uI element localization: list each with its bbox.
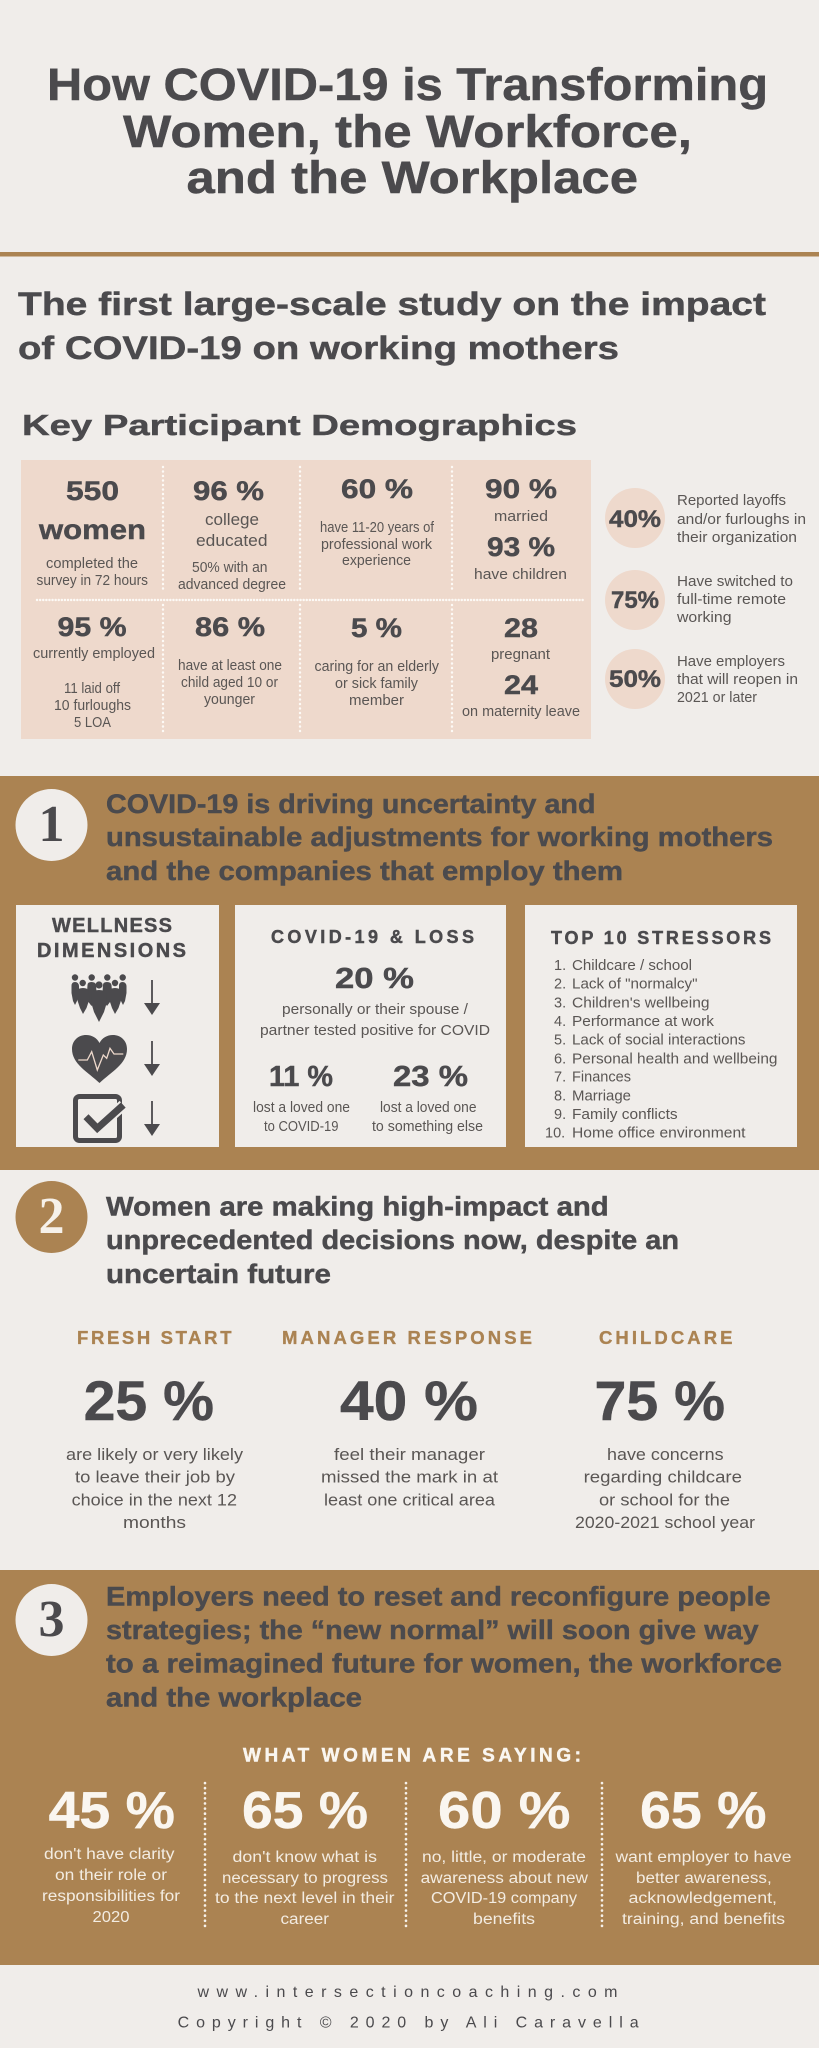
- stat: fresh start: [66, 1327, 244, 1532]
- card: top 10 stressors: 2.: [554, 977, 566, 993]
- stat: 65% employer awareness: [614, 1782, 792, 1928]
- card: covid-19 and loss: to COVID-19: [264, 1119, 338, 1135]
- card: wellness dimensions: DIMENSIONS: [37, 940, 186, 962]
- stat: 45%: don't have clarity: [44, 1846, 175, 1863]
- card: wellness dimensions: WELLNESS: [52, 915, 172, 937]
- card: covid-19 and loss: [235, 905, 506, 1147]
- footer: Copyright © 2020 by Ali Caravella: [178, 2015, 639, 2032]
- card: top 10 stressors: 1.: [554, 958, 566, 974]
- stat: 95% employed: 5 LOA: [74, 715, 111, 731]
- stat: 96% college educated: 96 %: [193, 476, 264, 506]
- stat: childcare: CHILDCARE: [599, 1327, 732, 1348]
- stat: 60% experience: professional work: [321, 537, 433, 553]
- stat: 90% married, 93% have children: [474, 474, 567, 583]
- stat: manager response: 40 %: [340, 1369, 478, 1432]
- callout: 40% layoffs: [605, 488, 806, 548]
- card: covid-19 and loss: 11 %: [269, 1061, 333, 1093]
- stat: 5% caring: caring for an elderly: [314, 659, 440, 675]
- stat: 28 pregnant, 24 on maternity leave: 28: [504, 613, 538, 643]
- stat: 5% caring: member: [349, 693, 404, 709]
- stat: childcare: 2020-2021 school year: [575, 1513, 755, 1532]
- stat: 96% college educated: educated: [196, 532, 268, 550]
- stat: 65% progress: to the next level in their: [215, 1890, 394, 1907]
- icon: heart with pulse: [72, 1035, 127, 1083]
- stat: 60% experience: experience: [342, 553, 411, 569]
- callout: 40% layoffs: their organization: [677, 529, 797, 546]
- panel: demographics: [21, 460, 591, 739]
- panel: section 3: [0, 1570, 819, 1965]
- stat: childcare: or school for the: [599, 1490, 730, 1509]
- card: top 10 stressors: 3.: [554, 995, 566, 1011]
- stat: 28 pregnant, 24 on maternity leave: [462, 613, 580, 720]
- callout: 75% remote: 75%: [611, 587, 659, 614]
- stat: 60% experience: 60 %: [341, 474, 413, 504]
- stat: 90% married, 93% have children: 93 %: [487, 532, 555, 562]
- stat: 65% employer awareness: want employer to have: [614, 1849, 792, 1866]
- title: How COVID-19 is Transforming: [47, 59, 768, 110]
- stat: 60% benefits: no, little, or moderate: [422, 1849, 586, 1866]
- heading: section 3: to a reimagined future for women, the workforce: [106, 1649, 782, 1679]
- heading: section 2: [106, 1192, 679, 1289]
- card: top 10 stressors: Childcare / school: [572, 958, 692, 974]
- stat: fresh start: 25 %: [84, 1369, 214, 1432]
- card: top 10 stressors: TOP 10 STRESSORS: [551, 928, 771, 948]
- stat: 90% married, 93% have children: 90 %: [485, 474, 557, 504]
- stat: 65% progress: [215, 1782, 394, 1928]
- heading: section 3: strategies; the “new normal” will soon give way: [106, 1615, 759, 1645]
- stat: 65% progress: don't know what is: [232, 1849, 377, 1866]
- subtitle: [18, 286, 766, 366]
- callout: 40% layoffs: and/or furloughs in: [677, 511, 806, 528]
- stat: 95% employed: 10 furloughs: [54, 698, 131, 714]
- stat: fresh start: are likely or very likely: [66, 1445, 244, 1464]
- stat: childcare: 75 %: [594, 1369, 725, 1432]
- stat: 65% progress: necessary to progress: [222, 1870, 388, 1887]
- card: top 10 stressors: Children's wellbeing: [572, 995, 710, 1011]
- stat: 65% employer awareness: 65 %: [640, 1782, 766, 1840]
- card: top 10 stressors: [525, 905, 797, 1147]
- stat: manager response: missed the mark in at: [321, 1468, 498, 1487]
- subtitle: of COVID-19 on working mothers: [18, 330, 619, 366]
- stat: 96% college educated: advanced degree: [178, 577, 286, 593]
- card: top 10 stressors: Lack of "normalcy": [572, 977, 698, 993]
- stat: 45%: 45 %: [49, 1782, 175, 1840]
- heading: section 2: unprecedented decisions now, despite an: [106, 1225, 679, 1255]
- card: top 10 stressors: Finances: [572, 1070, 631, 1086]
- stat: 95% employed: 95 %: [58, 612, 126, 642]
- stat: 60% benefits: 60 %: [438, 1782, 570, 1840]
- stat: 28 pregnant, 24 on maternity leave: on maternity leave: [462, 704, 580, 720]
- stat: 95% employed: 11 laid off: [64, 681, 121, 697]
- stat: 550 women: women: [38, 514, 146, 545]
- card: covid-19 and loss: 20 %: [335, 963, 414, 995]
- callout: 50% reopen: 2021 or later: [677, 689, 757, 706]
- stat: 86% child aged 10 or younger: 86 %: [195, 612, 265, 642]
- stat: 60% experience: have 11-20 years of: [320, 520, 435, 536]
- title: and the Workplace: [186, 152, 638, 203]
- stat: 96% college educated: 50% with an: [192, 560, 268, 576]
- stat: 95% employed: [33, 612, 155, 731]
- stat: 550 women: completed the: [46, 556, 138, 572]
- footer: [178, 1984, 639, 2032]
- card: wellness dimensions: [16, 905, 219, 1147]
- icon: number 2 badge: 2: [38, 1188, 64, 1245]
- stat: 550 women: survey in 72 hours: [36, 573, 148, 589]
- card: covid-19 and loss: 23 %: [393, 1061, 468, 1093]
- heading: section 1: [106, 789, 773, 886]
- stat: manager response: feel their manager: [334, 1445, 485, 1464]
- stat: 5% caring: or sick family: [335, 676, 419, 692]
- panel: section 2: [16, 1181, 755, 1532]
- arrow: down 2: [144, 1041, 160, 1076]
- callout: 50% reopen: that will reopen in: [677, 671, 798, 688]
- callout: 40% layoffs: Reported layoffs: [677, 492, 786, 509]
- stat: 28 pregnant, 24 on maternity leave: pregnant: [491, 647, 550, 663]
- card: top 10 stressors: Lack of social interactions: [572, 1033, 746, 1049]
- title: Women, the Workforce,: [123, 106, 692, 157]
- icon: number 3 badge: 3: [38, 1591, 64, 1648]
- stat: manager response: MANAGER RESPONSE: [282, 1327, 532, 1348]
- stat: 90% married, 93% have children: have children: [474, 566, 567, 583]
- stat: 90% married, 93% have children: married: [494, 508, 548, 525]
- heading: section 3: and the workplace: [106, 1683, 362, 1713]
- stat: childcare: regarding childcare: [584, 1468, 742, 1487]
- card: top 10 stressors: Marriage: [572, 1088, 631, 1104]
- heading: section 3: Employers need to reset and reconfigure people: [106, 1582, 771, 1612]
- card: top 10 stressors: Personal health and wellbeing: [572, 1051, 778, 1067]
- card: top 10 stressors: 6.: [554, 1051, 566, 1067]
- stat: 550 women: 550: [66, 476, 119, 506]
- card: covid-19 and loss: partner tested positive for COVID: [260, 1022, 490, 1039]
- callout: 75% remote: Have switched to: [677, 573, 793, 590]
- heading: what women are saying: WHAT WOMEN ARE SAYING:: [243, 1746, 581, 1767]
- heading: key participant demographics: Key Participant Demographics: [22, 410, 577, 442]
- stat: manager response: [282, 1327, 532, 1509]
- stat: 28 pregnant, 24 on maternity leave: 24: [504, 670, 538, 700]
- stat: 45%: on their role or: [55, 1867, 167, 1884]
- stat: 45%: [42, 1782, 180, 1926]
- card: covid-19 and loss: to something else: [372, 1119, 483, 1135]
- footer: www.intersectioncoaching.com: [196, 1984, 618, 2001]
- callout: 75% remote: [605, 570, 793, 630]
- stat: 86% child aged 10 or younger: child aged 10 or: [181, 675, 278, 691]
- stat: 86% child aged 10 or younger: younger: [204, 692, 255, 708]
- arrow: down 1: [144, 980, 160, 1015]
- callout: 50% reopen: Have employers: [677, 653, 785, 670]
- card: top 10 stressors: Home office environment: [572, 1125, 746, 1141]
- callout: 50% reopen: 50%: [609, 666, 661, 693]
- card: top 10 stressors: 8.: [554, 1088, 566, 1104]
- stat: fresh start: months: [123, 1513, 186, 1532]
- stat: 65% progress: career: [280, 1911, 329, 1928]
- stat: 5% caring: [314, 613, 440, 709]
- icon: number 1 badge: 1: [38, 796, 64, 853]
- stat: childcare: [575, 1327, 755, 1532]
- stat: 65% employer awareness: better awareness,: [636, 1870, 772, 1887]
- panel: section 1: [0, 776, 819, 1170]
- card: covid-19 and loss: lost a loved one: [253, 1100, 350, 1116]
- title: [47, 59, 768, 203]
- heading: section 1: unsustainable adjustments for working mothers: [106, 822, 773, 852]
- stat: 96% college educated: [178, 476, 286, 593]
- callout: 40% layoffs: 40%: [609, 506, 661, 533]
- card: top 10 stressors: 7.: [554, 1070, 566, 1086]
- stat: 65% progress: 65 %: [242, 1782, 368, 1840]
- card: covid-19 and loss: lost a loved one: [380, 1100, 476, 1116]
- heading: section 1: COVID-19 is driving uncertainty and: [106, 789, 596, 819]
- icon: number 1 badge: [16, 789, 88, 861]
- stat: 86% child aged 10 or younger: have at least one: [178, 658, 282, 674]
- stat: manager response: least one critical area: [324, 1490, 496, 1509]
- header divider band: [0, 252, 819, 256]
- card: covid-19 and loss: personally or their spouse /: [282, 1001, 469, 1018]
- card: top 10 stressors: Performance at work: [572, 1014, 715, 1030]
- heading: section 1: and the companies that employ them: [106, 856, 623, 886]
- stat: 60% benefits: COVID-19 company: [431, 1890, 577, 1907]
- stat: childcare: have concerns: [607, 1445, 724, 1464]
- stat: 95% employed: currently employed: [33, 646, 155, 662]
- card: top 10 stressors: Family conflicts: [572, 1107, 678, 1123]
- card: covid-19 and loss: COVID-19 & LOSS: [271, 927, 474, 947]
- subtitle: The first large-scale study on the impact: [18, 286, 766, 322]
- stat: 550 women: [36, 476, 148, 589]
- stat: 45%: 2020: [92, 1909, 130, 1926]
- stat: 60% benefits: awareness about new: [421, 1870, 589, 1887]
- callout: 50% reopen: [605, 649, 798, 709]
- arrow: down 3: [144, 1101, 160, 1136]
- icon: checkbox: [76, 1096, 123, 1140]
- callout: 75% remote: working: [676, 609, 732, 626]
- card: top 10 stressors: 9.: [554, 1107, 566, 1123]
- stat: 60% experience: [320, 474, 435, 569]
- heading: section 2: uncertain future: [106, 1259, 331, 1289]
- stat: fresh start: choice in the next 12: [72, 1490, 237, 1509]
- icon: number 2 badge: [16, 1181, 88, 1253]
- stat: 96% college educated: college: [205, 511, 259, 529]
- stat: 86% child aged 10 or younger: [178, 612, 282, 708]
- stat: 5% caring: 5 %: [351, 613, 402, 643]
- card: top 10 stressors: 4.: [554, 1014, 566, 1030]
- card: top 10 stressors: 10.: [545, 1125, 565, 1141]
- icon: number 3 badge: [16, 1584, 88, 1656]
- heading: section 3: [106, 1582, 782, 1713]
- stat: 65% employer awareness: acknowledgement,: [628, 1890, 777, 1907]
- callout: 75% remote: full-time remote: [677, 591, 786, 608]
- stat: fresh start: to leave their job by: [75, 1468, 236, 1487]
- card: top 10 stressors: 5.: [554, 1033, 566, 1049]
- stat: 45%: responsibilities for: [42, 1888, 180, 1905]
- stat: 60% benefits: benefits: [473, 1911, 535, 1928]
- stat: 65% employer awareness: training, and benefits: [622, 1911, 785, 1928]
- stat: fresh start: FRESH START: [77, 1327, 232, 1348]
- stat: 60% benefits: [421, 1782, 589, 1928]
- heading: section 2: Women are making high-impact and: [106, 1192, 609, 1222]
- icon: group of people: [72, 974, 126, 1022]
